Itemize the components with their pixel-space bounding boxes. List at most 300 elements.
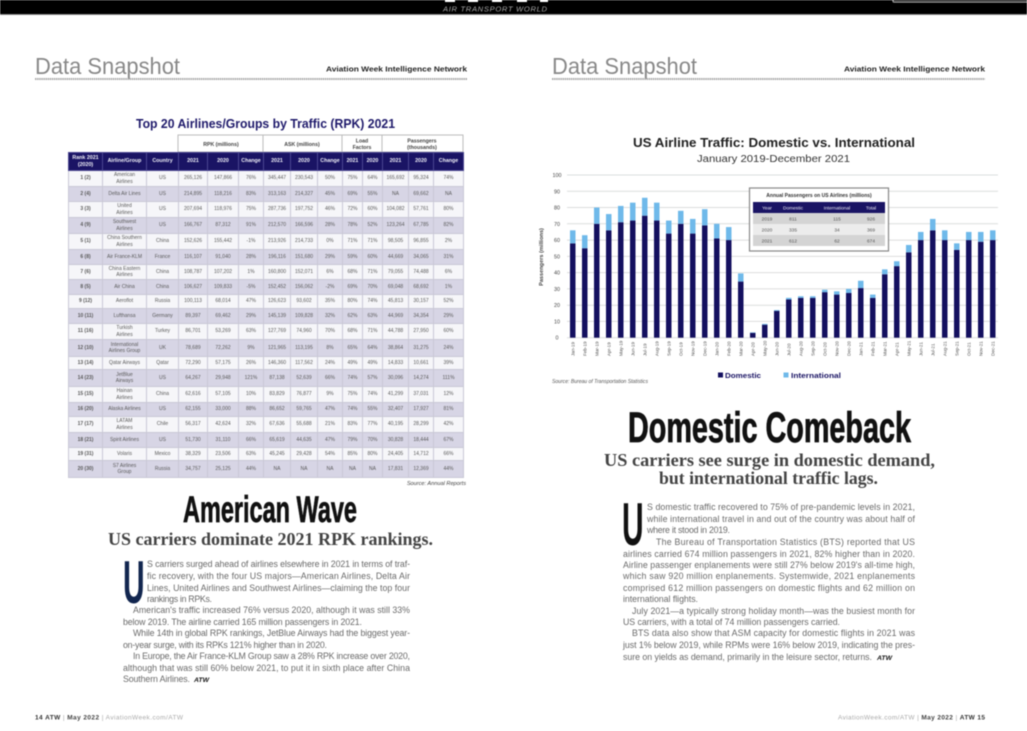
rankings table: 16 (20): [78, 406, 93, 412]
left body text: fic recovery, with the four US majors—American Airlines, Delta Air: [147, 571, 410, 581]
rankings table: 230,543: [295, 175, 313, 181]
right body text: which saw 920 million enplanements. Systemwide, 2021 enplanements: [622, 571, 916, 581]
rankings table: 77%: [367, 421, 378, 427]
month labels: Oct-20: [822, 342, 828, 356]
right body text: where it stood in 2019.: [646, 525, 730, 535]
rankings table: US: [159, 406, 166, 412]
rankings table: Airlines Group: [109, 348, 140, 354]
rankings table: 147,866: [214, 175, 232, 181]
rankings table: 69,462: [215, 313, 231, 319]
rankings table: Airlines: [116, 226, 133, 232]
rankings table: 3 (3): [80, 206, 91, 212]
rankings table: UK: [159, 345, 166, 351]
inset table: annual passengers: 811: [789, 216, 797, 222]
rankings table: 100,113: [184, 298, 202, 304]
rankings table: -5%: [247, 284, 255, 290]
right subhead: but international traffic lags.: [659, 468, 878, 488]
month labels: Mar-19: [594, 341, 600, 356]
rankings table: 10,661: [413, 360, 429, 366]
rankings table: 44%: [246, 466, 256, 472]
rankings table: 53,269: [215, 328, 231, 334]
left footer: 14 ATW | May 2022 | AviationWeek.com/ATW: [35, 714, 184, 722]
rankings table: 47%: [325, 406, 335, 412]
rankings table: 11 (16): [78, 328, 93, 334]
month labels: May-21: [906, 340, 912, 356]
rankings table: 155,442: [214, 238, 232, 244]
rankings table: 70%: [325, 328, 335, 334]
rankings table: 214,895: [184, 191, 202, 197]
rankings table: 9%: [247, 345, 255, 351]
month labels: Oct-19: [678, 342, 684, 356]
rankings table: 47%: [246, 298, 256, 304]
rankings table: 2021: [271, 158, 283, 164]
rankings table: 28,299: [413, 421, 429, 427]
right page header: [552, 53, 986, 79]
month labels: [570, 340, 996, 356]
rankings table: 44,969: [388, 313, 403, 319]
right body text: while international travel in and out of the country was about half of: [646, 514, 916, 524]
rankings table: 68%: [347, 328, 358, 334]
rankings table: 24%: [325, 360, 335, 366]
rankings table: 63%: [367, 313, 378, 319]
rankings table: 113,195: [295, 345, 313, 351]
rankings table: 15 (15): [78, 391, 93, 397]
rankings table: 29,428: [296, 451, 312, 457]
rankings table: China: [156, 269, 169, 275]
rankings table: Change: [439, 158, 458, 164]
rankings table: Country: [152, 158, 173, 164]
rankings table: American: [114, 172, 135, 178]
right page header: Data Snapshot: [552, 53, 698, 79]
rankings table: 106,627: [184, 284, 202, 290]
month labels: Nov-21: [978, 341, 984, 356]
rankings table: 152,071: [295, 269, 313, 275]
rankings table: International: [111, 342, 138, 348]
rankings table: 62%: [347, 313, 358, 319]
right body text: BTS data also show that ASM capacity for domestic flights in 2021 was: [632, 628, 916, 638]
rankings table: Airlines: [116, 332, 133, 338]
inset table: annual passengers: Domestic: [783, 206, 804, 212]
rankings table: 34,757: [185, 466, 201, 472]
rankings table: 71%: [347, 238, 358, 244]
rankings table: 65,619: [269, 437, 285, 443]
rankings table: 67,785: [413, 222, 429, 228]
inset table: annual passengers: 115: [833, 216, 841, 222]
rankings table: 287,736: [268, 206, 286, 212]
rankings table: 57,105: [215, 391, 231, 397]
month labels: Feb-19: [582, 341, 588, 356]
rankings table: Group: [118, 469, 131, 475]
month labels: Jul-19: [642, 343, 648, 356]
rankings table: 52%: [443, 298, 454, 304]
rankings table: Qatar: [156, 360, 169, 366]
rankings table: 88%: [246, 406, 256, 412]
rankings table: 20 (30): [78, 466, 93, 472]
rankings table: 8 (5): [80, 284, 91, 290]
rankings table: 71%: [367, 328, 378, 334]
rankings table: 54%: [325, 451, 335, 457]
rankings table: 345,447: [268, 175, 286, 181]
rankings table: 64%: [367, 175, 378, 181]
table group headers: [178, 135, 463, 152]
rankings table: 65%: [347, 345, 358, 351]
y axis with gridlines: Passengers (millions): [539, 228, 545, 286]
rankings table: 47%: [325, 437, 335, 443]
rankings table: 86,652: [269, 406, 285, 412]
rankings table: 71%: [367, 238, 378, 244]
rankings table: 9%: [326, 391, 334, 397]
rankings table: Alaska Airlines: [108, 406, 141, 412]
rankings table: 160,800: [268, 269, 286, 275]
month labels: Feb-20: [726, 341, 732, 356]
rankings table: 95,324: [413, 175, 429, 181]
rankings table: 127,769: [268, 328, 286, 334]
left body text: While 14th in global RPK rankings, JetBlue Airways had the biggest year-: [133, 628, 410, 638]
rankings table: 91,040: [215, 254, 231, 260]
month labels: May-19: [618, 340, 624, 356]
rankings table: Air China: [114, 284, 135, 290]
inset table: annual passengers: 369: [867, 228, 875, 234]
month labels: Jun-19: [630, 342, 636, 356]
rankings table: US: [159, 375, 166, 381]
rankings table: 63%: [246, 328, 256, 334]
rankings table: 152,626: [184, 238, 202, 244]
rankings table: 44,788: [388, 328, 403, 334]
rankings table: NA: [327, 466, 333, 472]
month labels: Dec-21: [990, 341, 996, 356]
rankings table: 213,926: [268, 238, 286, 244]
rankings table: 13 (14): [78, 360, 93, 366]
rankings table: -1%: [247, 238, 255, 244]
rankings table: 165,692: [386, 175, 405, 181]
month labels: Mar-20: [738, 341, 744, 356]
inset table: annual passengers: Annual Passengers on US Airlines (millions): [766, 193, 872, 199]
rankings table: 39%: [443, 360, 454, 366]
inset table: annual passengers: International: [824, 206, 850, 212]
month labels: Mar-21: [882, 341, 888, 356]
rankings table: 69,662: [413, 191, 429, 197]
rankings table: 52,639: [296, 375, 312, 381]
rankings table: S7 Airlines: [113, 463, 136, 469]
rankings table: 25,125: [215, 466, 231, 472]
rankings table: 78%: [347, 222, 358, 228]
rankings table: 108,787: [184, 269, 202, 275]
rankings table: 72,290: [185, 360, 201, 366]
rankings table: 38,329: [185, 451, 201, 457]
month labels: Apr-21: [894, 342, 900, 356]
month labels: Nov-19: [690, 341, 696, 356]
rankings table: US: [159, 206, 166, 212]
rankings table: 207,694: [184, 206, 202, 212]
right body text: comprised 612 million passengers on domestic flights and 62 million on: [623, 583, 915, 593]
rankings table: 89,397: [185, 313, 201, 319]
table group headers: Load: [356, 138, 368, 144]
rankings table: Airlines: [116, 242, 133, 248]
rankings table: 30,828: [388, 437, 403, 443]
month labels: Jan-19: [570, 342, 576, 356]
rankings table: China Southern: [107, 235, 142, 241]
left body text: Lines, United Airlines and Southwest Airlines—claiming the top four: [147, 583, 410, 593]
left headline: American Wave: [183, 489, 357, 530]
rankings table: 55%: [367, 191, 378, 197]
month labels: Nov-20: [834, 341, 840, 356]
rankings table: 32%: [246, 421, 256, 427]
rankings table: US: [159, 191, 166, 197]
inset table: annual passengers: Year: [762, 206, 772, 212]
month labels: Sep-21: [954, 341, 960, 356]
inset table: annual passengers: 2021: [762, 238, 773, 244]
rankings table: 80%: [347, 298, 358, 304]
y axis with gridlines: 80: [554, 206, 560, 212]
top bar: publication masthead: [0, 0, 1027, 15]
rankings table: 86,701: [185, 328, 201, 334]
rankings table: 72,262: [215, 345, 231, 351]
right subhead: [604, 450, 935, 488]
month labels: Jun-20: [774, 342, 780, 356]
rankings table: 26%: [246, 360, 256, 366]
left body text: American's traffic increased 76% versus 2020, although it was still 33%: [133, 605, 410, 615]
inset table: annual passengers: 612: [789, 238, 797, 244]
month labels: Jan-20: [714, 342, 720, 356]
rankings table: 69,048: [388, 284, 403, 290]
left body text: below 2019. The airline carried 165 million passengers in 2021.: [123, 617, 362, 627]
rankings table: 29,948: [215, 375, 231, 381]
rankings table: 42,624: [215, 421, 231, 427]
rankings table: 214,733: [295, 238, 313, 244]
rankings table: 121,965: [268, 345, 286, 351]
y axis with gridlines: 50: [554, 254, 560, 260]
left page header: Data Snapshot: [35, 53, 181, 79]
rankings table: 49%: [367, 360, 378, 366]
rankings table: 76%: [246, 175, 256, 181]
inset table: annual passengers: 2020: [762, 228, 773, 234]
rankings table: 116,107: [184, 254, 202, 260]
rankings table: 126,623: [268, 298, 286, 304]
right subhead: US carriers see surge in domestic demand,: [604, 450, 935, 470]
rankings table: 14,712: [413, 451, 429, 457]
rankings table: 96,855: [413, 238, 429, 244]
rankings table: China: [156, 391, 169, 397]
rankings table: Russia: [155, 466, 170, 472]
right page header: Aviation Week Intelligence Network: [844, 64, 986, 74]
rankings table: 8%: [326, 345, 334, 351]
month labels: Aug-21: [942, 341, 948, 356]
rankings table: Spirit Airlines: [110, 437, 139, 443]
rankings table: 79%: [347, 437, 358, 443]
y axis with gridlines: 10: [554, 319, 560, 325]
rankings table: 57,761: [413, 206, 429, 212]
rankings table: 78,689: [185, 345, 201, 351]
rankings table: 156,062: [295, 284, 313, 290]
rankings table: 2020: [415, 158, 427, 164]
rankings table: 313,163: [268, 191, 286, 197]
left body text: [123, 559, 410, 684]
rankings table: 68,692: [413, 284, 429, 290]
table group headers: RPK (millions): [203, 142, 239, 148]
rankings table: 83,829: [269, 391, 285, 397]
rankings table: 44,669: [388, 254, 403, 260]
y axis with gridlines: 20: [554, 303, 560, 309]
left page header: Aviation Week Intelligence Network: [326, 64, 468, 74]
month labels: May-20: [762, 340, 768, 356]
rankings table: 24%: [443, 345, 454, 351]
rankings table: 63%: [246, 451, 256, 457]
rankings table: 31%: [443, 254, 454, 260]
rankings table: 10 (11): [78, 313, 93, 319]
y axis with gridlines: 90: [554, 189, 560, 195]
rankings table: 17,927: [413, 406, 429, 412]
right body text: just 1% below 2019, while RPMs were 16% below 2019, indicating the pres-: [622, 640, 915, 650]
month labels: Jan-21: [858, 342, 864, 356]
table group headers: Factors: [353, 145, 371, 151]
rankings table: 18,444: [413, 437, 429, 443]
rankings table: China: [156, 284, 169, 290]
rankings table: 72%: [347, 206, 358, 212]
left body text: S carriers surged ahead of airlines elsewhere in 2021 in terms of traf-: [147, 559, 410, 569]
y axis with gridlines: [539, 173, 998, 342]
month labels: Jul-20: [786, 343, 792, 356]
left body text: ATW: [193, 677, 210, 684]
rankings table: 74%: [367, 298, 378, 304]
rankings table: 29%: [443, 313, 454, 319]
rankings table: Delta Air Lines: [108, 191, 141, 197]
rankings table: 4 (9): [80, 222, 91, 228]
right body text: July 2021—a typically strong holiday month—was the busiest month for: [632, 606, 915, 616]
rankings table: 68,014: [215, 298, 231, 304]
rankings table: Airline/Group: [108, 158, 141, 164]
rankings table: [67, 151, 465, 478]
rankings table: 93,602: [296, 298, 312, 304]
rankings table: 2%: [445, 238, 452, 244]
rankings table: JetBlue: [116, 372, 133, 378]
rankings table: 2020: [367, 158, 378, 164]
rankings table: NA: [369, 466, 376, 472]
inset table: annual passengers: 62: [834, 238, 840, 244]
rankings table: 42%: [443, 421, 454, 427]
rankings table: NA: [301, 466, 307, 472]
rankings table: 1 (2): [80, 175, 91, 181]
rankings table: 56,317: [185, 421, 201, 427]
rankings table: 49%: [347, 360, 358, 366]
rankings table: 46%: [325, 206, 335, 212]
rankings table: 32%: [325, 313, 335, 319]
rankings table: 75%: [246, 206, 256, 212]
rankings table: 2 (4): [80, 191, 91, 197]
rankings table: 7 (6): [80, 269, 91, 275]
rankings table: 55%: [367, 406, 378, 412]
rankings table: 6 (8): [80, 254, 91, 260]
inset table: annual passengers: 674: [867, 238, 875, 244]
rankings table: 6%: [326, 269, 334, 275]
rankings table: 2021: [187, 158, 199, 164]
rankings table: 14,833: [388, 360, 403, 366]
rankings table: 31,110: [216, 437, 230, 443]
rankings table: 74%: [347, 406, 358, 412]
chart legend: [718, 371, 841, 380]
rankings table: Airlines: [116, 272, 133, 278]
rankings table: 14 (23): [78, 375, 93, 381]
rankings table: 27,950: [413, 328, 429, 334]
rankings table: 44%: [443, 466, 454, 472]
month labels: Oct-21: [966, 342, 972, 356]
rankings table: 17 (17): [78, 421, 93, 427]
rankings table: 45%: [325, 191, 335, 197]
rankings table: 68%: [347, 269, 358, 275]
rankings table: 69%: [347, 284, 358, 290]
rankings table: 67,636: [269, 421, 285, 427]
rankings table: 85%: [347, 451, 358, 457]
rankings table: 62,616: [185, 391, 201, 397]
rankings table: 12 (10): [78, 345, 93, 351]
month labels: Jun-21: [918, 342, 924, 356]
rankings table: 98,505: [388, 238, 403, 244]
inset table: annual passengers: 2019: [762, 216, 773, 222]
rankings table: NA: [349, 466, 356, 472]
rankings table: 117,562: [295, 360, 313, 366]
rankings table: 74%: [347, 375, 358, 381]
rankings table: 5 (1): [80, 238, 91, 244]
rankings table: 24,405: [388, 451, 403, 457]
rankings table: US: [159, 175, 166, 181]
rankings table: 212,570: [268, 222, 286, 228]
rankings table: NA: [392, 191, 399, 197]
rankings table: 2020: [217, 158, 229, 164]
right body text: ATW: [876, 655, 893, 662]
rankings table: 33,000: [215, 406, 231, 412]
rankings table: 64,267: [185, 375, 201, 381]
rankings table: 9 (12): [79, 298, 92, 304]
rankings table: 28%: [246, 254, 256, 260]
table group headers: ASK (millions): [284, 142, 320, 148]
rankings table: 118,216: [214, 191, 232, 197]
left body text: Southern Airlines.: [123, 674, 190, 684]
left subhead: US carriers dominate 2021 RPK rankings.: [108, 529, 433, 549]
table group headers: (thousands): [407, 145, 437, 151]
month labels: Feb-21: [870, 341, 876, 356]
rankings table: 265,126: [184, 175, 202, 181]
rankings table: 75%: [347, 391, 358, 397]
rankings table: United: [117, 203, 132, 209]
rankings table: 0%: [326, 238, 334, 244]
rankings table: 59,765: [296, 406, 312, 412]
month labels: Dec-20: [846, 341, 852, 356]
rankings table: 52%: [367, 222, 378, 228]
rankings table: 35%: [325, 298, 335, 304]
rankings table: 51,730: [185, 437, 201, 443]
rankings table: 145,139: [268, 313, 286, 319]
rankings table: 70%: [367, 437, 378, 443]
rankings table: Chile: [157, 421, 168, 427]
rankings table: Change: [320, 158, 340, 164]
rankings table: NA: [445, 191, 452, 197]
rankings table: 23,506: [215, 451, 231, 457]
rankings table: 166,596: [295, 222, 313, 228]
rankings table: Turkish: [116, 325, 133, 331]
month labels: Sep-20: [810, 341, 816, 356]
rankings table: 107,202: [214, 269, 232, 275]
left body text: In Europe, the Air France-KLM Group saw a 28% RPK increase over 2020,: [133, 651, 410, 661]
left body text: although that was still 60% below 2021, to put it in sixth place after China: [123, 663, 410, 673]
rankings table: 34,065: [413, 254, 429, 260]
rankings table: 2021: [347, 158, 358, 164]
right body text: US carriers, with a total of 74 million passengers carried.: [623, 617, 840, 627]
rankings table: 69%: [347, 191, 358, 197]
international bars: [570, 198, 996, 333]
table title: Top 20 Airlines/Groups by Traffic (RPK) 2021: [136, 117, 395, 131]
rankings table: 79,055: [388, 269, 403, 275]
rankings table: 74,960: [296, 328, 312, 334]
rankings table: 62,155: [185, 406, 201, 412]
